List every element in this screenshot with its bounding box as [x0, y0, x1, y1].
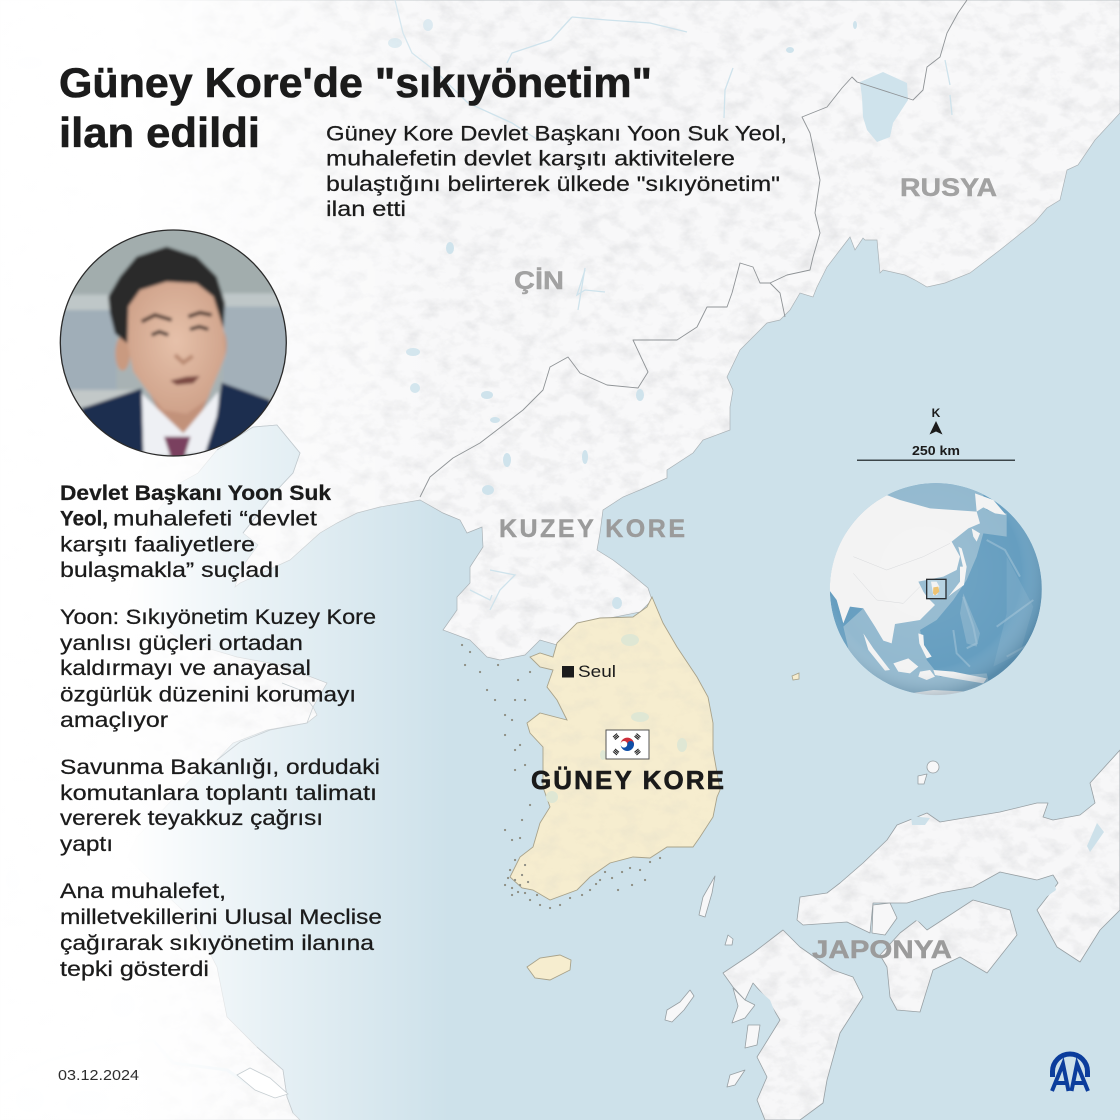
map label: ÇİN: ÇİN	[514, 267, 564, 295]
lake: Khanka	[860, 72, 908, 142]
national borders	[420, 0, 967, 497]
photo: tie	[164, 437, 191, 460]
South Korea islands	[462, 645, 660, 908]
photo: eyes and brows	[142, 315, 172, 322]
South Korea lakes and rivers	[546, 634, 687, 803]
text block: defence ministry: komutanlara toplantı talimatı	[60, 782, 377, 805]
Seoul marker and label	[562, 662, 616, 681]
intro text block: muhalefetin devlet karşıtı aktivitelere	[326, 148, 735, 170]
text block: main opposition: Ana muhalefet,	[60, 880, 226, 903]
text block: accusation of opposition: bulaşmakla” suçladı	[60, 559, 280, 582]
left white fade over the map	[0, 0, 450, 1120]
inland sea details, Japan	[753, 816, 1104, 1027]
land: Japan	[665, 750, 1120, 1120]
compass: north arrow: K	[932, 406, 941, 420]
globe: land	[827, 493, 1006, 700]
date: 03.12.2024	[58, 1068, 139, 1084]
map label: JAPONYA: JAPONYA	[812, 936, 952, 964]
politician portrait photo	[60, 229, 287, 457]
Seoul marker and label: Seul	[578, 662, 616, 681]
text block: main opposition: milletvekillerini Ulusal Meclise	[60, 906, 382, 929]
compass: north arrow	[930, 406, 942, 434]
text block: accusation of opposition: muhalefeti “devlet	[113, 508, 317, 530]
map label: RUSYA: RUSYA	[900, 174, 997, 202]
photo: background	[71, 292, 273, 456]
globe: continental shelves	[843, 483, 1033, 696]
text block: accusation of opposition: Devlet Başkanı Yoon Suk	[60, 482, 331, 505]
text block: defence ministry: yaptı	[60, 833, 113, 856]
globe: locator box on Korea	[927, 579, 946, 599]
photo: nose and mouth	[175, 355, 193, 363]
land: South Korea	[462, 590, 799, 980]
faint coast and estuary on the faded side	[217, 425, 313, 1113]
globe: ocean trenches	[953, 540, 1037, 667]
title	[59, 59, 652, 156]
photo: circular frame	[60, 230, 286, 456]
Jeju island	[527, 955, 571, 980]
intro text block	[326, 122, 787, 221]
icon: South Korean flag	[606, 730, 649, 759]
globe: land border tint	[853, 543, 950, 603]
text block: accusation of opposition	[60, 482, 331, 582]
text block: main opposition: çağırarak sıkıyönetim ilanına	[60, 932, 374, 955]
text block: defence ministry: vererek teyakkuz çağrısı	[60, 807, 323, 830]
icon: AA logo	[1052, 1054, 1088, 1091]
text block: purpose of martial law: amaçlıyor	[60, 709, 168, 732]
text block: main opposition	[60, 880, 382, 981]
locator globe	[830, 483, 1042, 696]
photo: suit	[82, 387, 145, 452]
photo: ears	[115, 336, 130, 371]
photo: face	[127, 282, 225, 414]
text block: purpose of martial law: özgürlük düzenini korumayı	[60, 684, 356, 706]
South Korea relief	[500, 590, 730, 910]
scale bar: 250 km: 250 km	[912, 443, 960, 458]
photo: neck	[152, 396, 208, 434]
text block: accusation of opposition: Yeol,	[60, 508, 108, 530]
title: ilan edildi	[59, 109, 260, 156]
text block: main opposition: tepki gösterdi	[60, 958, 209, 981]
map label: GÜNEY KORE: GÜNEY KORE	[531, 765, 724, 795]
text block: purpose of martial law	[60, 606, 376, 732]
text block: purpose of martial law: yanlısı güçleri ortadan	[60, 632, 303, 655]
text block: defence ministry: Savunma Bakanlığı, ordudaki	[60, 756, 380, 779]
intro text block: ilan etti	[326, 198, 406, 221]
small island east of Korea	[792, 673, 799, 680]
intro text block: bulaştığını belirterek ülkede "sıkıyönetim"	[326, 173, 780, 196]
map label: KUZEY KORE: KUZEY KORE	[499, 515, 685, 543]
text block: purpose of martial law: Yoon: Sıkıyönetim Kuzey Kore	[60, 606, 376, 629]
text block: defence ministry	[60, 756, 380, 856]
text block: purpose of martial law: kaldırmayı ve anayasal	[60, 657, 311, 680]
terrain relief texture	[287, 0, 1120, 1118]
photo: hair	[108, 247, 225, 343]
photo: shirt	[142, 392, 218, 457]
title: Güney Kore'de "sıkıyönetim"	[59, 59, 652, 106]
intro text block: Güney Kore Devlet Başkanı Yoon Suk Yeol,	[326, 122, 787, 146]
text block: accusation of opposition: karşıtı faaliyetlere	[60, 534, 255, 556]
